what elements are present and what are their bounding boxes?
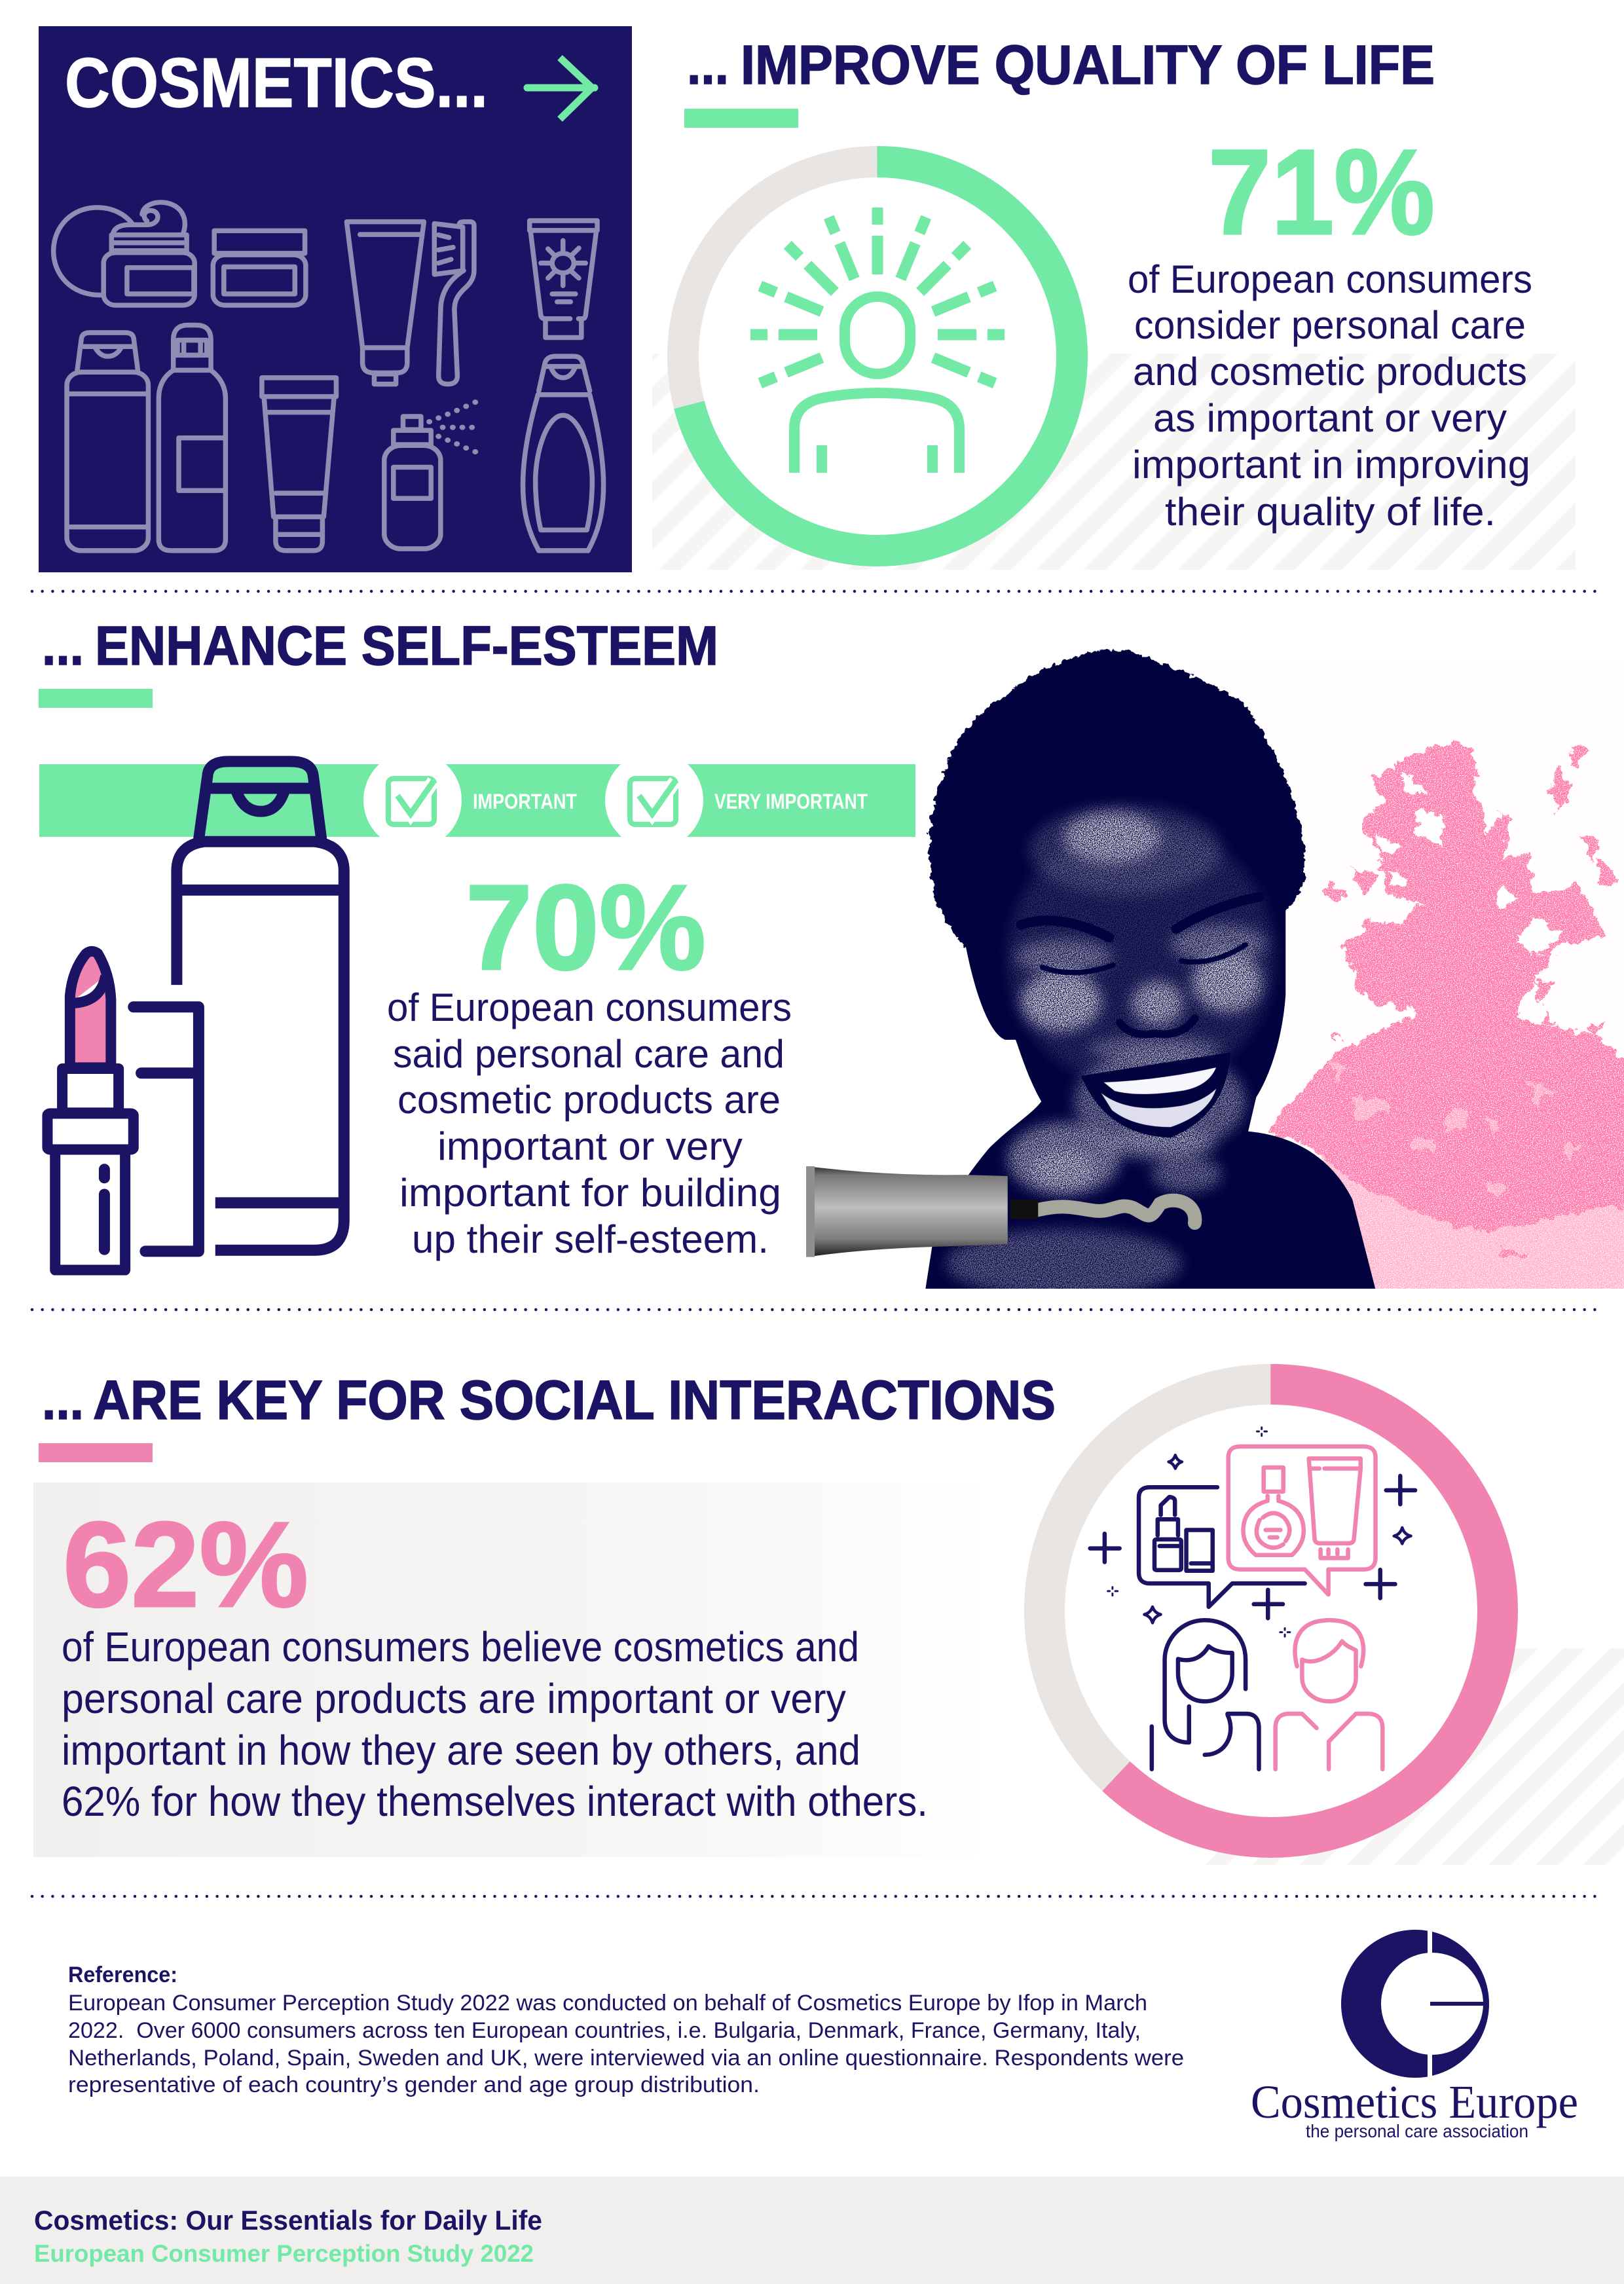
label: very important: VERY IMPORTANT <box>714 790 868 813</box>
text: reference note: Netherlands, Poland, Spain, Sweden and UK, were interviewed via an online questionnaire. Respondents were <box>68 2046 1184 2071</box>
stat: 70%: 70% <box>466 860 706 995</box>
accent bar: pink <box>39 1443 153 1462</box>
text: social paragraph: of European consumers believe cosmetics and <box>62 1623 859 1670</box>
text: reference note: 2022. Over 6000 consumers across ten European countries, i.e. Bulgaria, Denmark, France, Germany, Italy, <box>68 2018 1141 2043</box>
icon: checkbox very important <box>630 779 676 824</box>
title: cosmetics: COSMETICS... <box>65 43 488 122</box>
text: social paragraph: personal care products are important or very <box>62 1675 846 1722</box>
heading: social interactions: ARE KEY FOR SOCIAL INTERACTIONS <box>93 1369 1056 1431</box>
text: quality of life paragraph <box>1128 257 1532 534</box>
photo: silver tube squeezing cream <box>806 1166 1195 1257</box>
icon: two people talking about cosmetics <box>1090 1428 1415 1769</box>
text: self-esteem paragraph: said personal care and <box>393 1032 784 1076</box>
text: reference note: representative of each country’s gender and age group distribution. <box>68 2072 760 2097</box>
logo: cosmetics europe: Cosmetics Europe <box>1251 2076 1578 2128</box>
photo: facial features <box>1021 897 1259 1137</box>
photo: powder pink background <box>1268 740 1624 1289</box>
logo: cosmetics europe: the personal care association <box>1306 2121 1528 2141</box>
panel: social stat <box>33 1483 989 1857</box>
arrow: right <box>527 58 595 119</box>
photo: stippled highlights on skin <box>946 805 1275 1297</box>
logo: cosmetics europe <box>1251 1925 1578 2141</box>
text: quality of life paragraph: important in improving <box>1132 443 1530 487</box>
label: important: IMPORTANT <box>473 790 577 813</box>
text: self-esteem paragraph: important for building <box>399 1171 781 1215</box>
footer subtitle: European Consumer Perception Study 2022 <box>34 2240 534 2267</box>
text: quality of life paragraph: consider personal care <box>1134 303 1526 347</box>
icon: bottle and lipstick <box>47 762 344 1270</box>
text: reference note <box>68 1962 1184 2097</box>
accent bar: green <box>39 689 153 708</box>
chart: donut 71% <box>683 162 1072 551</box>
heading: enhance self-esteem: ... <box>42 615 84 676</box>
text: social paragraph: important in how they are seen by others, and <box>62 1727 860 1774</box>
text: quality of life paragraph: of European consumers <box>1128 257 1532 301</box>
text: self-esteem paragraph: of European consumers <box>387 985 792 1029</box>
text: quality of life paragraph: their quality of life. <box>1165 490 1496 534</box>
text: reference note: European Consumer Perception Study 2022 was conducted on behalf of Cosmetics Europe by Ifop in March <box>68 1991 1147 2016</box>
footer title: Cosmetics: Our Essentials for Daily Life <box>34 2205 542 2236</box>
stripes: top right background <box>652 354 1576 570</box>
heading: social interactions: ... <box>42 1369 84 1431</box>
text: self-esteem paragraph: up their self-esteem. <box>412 1217 769 1261</box>
icon: radiant person <box>750 208 1005 473</box>
footer band <box>0 2177 1624 2284</box>
text: self-esteem paragraph: important or very <box>437 1124 743 1168</box>
banner: important and very important <box>39 751 915 850</box>
photo: laughing woman silhouette <box>925 650 1376 1297</box>
panel: cosmetics intro <box>39 26 632 572</box>
heading: improve quality of life: ... <box>687 34 729 96</box>
heading: enhance self-esteem: ENHANCE SELF-ESTEEM <box>95 615 718 676</box>
text: quality of life paragraph: as important or very <box>1153 396 1507 440</box>
text: self-esteem paragraph: cosmetic products are <box>397 1078 781 1122</box>
icon: checkbox important <box>388 779 434 824</box>
text: social paragraph <box>62 1623 928 1825</box>
stripes: social section background <box>1205 1648 1624 1865</box>
text: social paragraph: 62% for how they themselves interact with others. <box>62 1778 928 1825</box>
text: self-esteem paragraph <box>387 985 792 1261</box>
stat: 62%: 62% <box>63 1498 308 1632</box>
icons: cosmetic products outlines <box>54 202 604 551</box>
text: reference note: Reference: <box>68 1962 177 1987</box>
stat: 71%: 71% <box>1208 125 1435 260</box>
heading: improve quality of life: IMPROVE QUALITY OF LIFE <box>741 34 1435 96</box>
chart: donut 62% <box>1044 1384 1498 1837</box>
text: quality of life paragraph: and cosmetic products <box>1133 350 1527 394</box>
accent bar: green <box>684 109 798 128</box>
